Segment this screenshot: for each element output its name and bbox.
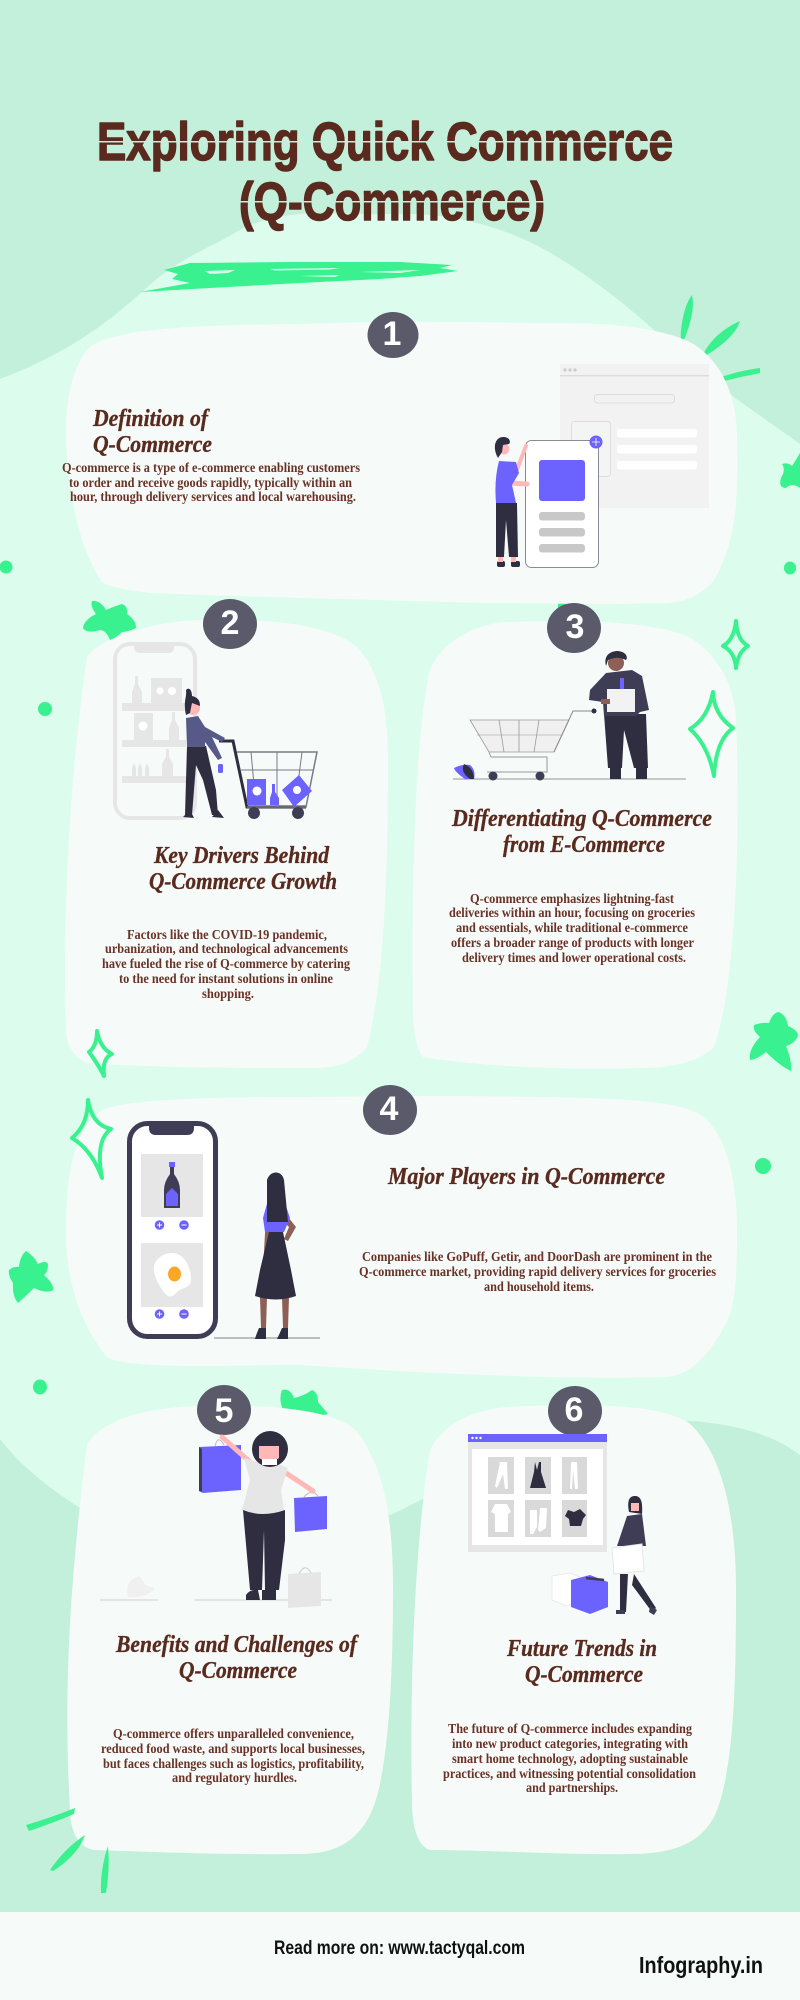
badge 2 — [203, 599, 257, 649]
text block 6: and partnerships. — [526, 1781, 618, 1796]
illustration: online clothing store — [468, 1434, 657, 1615]
badge 3 — [547, 603, 601, 653]
heading 6 — [506, 1636, 657, 1688]
brush stroke underline — [140, 262, 458, 292]
decoration: star behind badge 3 — [558, 603, 572, 612]
panel: card 6 — [411, 1405, 736, 1854]
text block 5: and regulatory hurdles. — [172, 1771, 297, 1786]
badge 5 — [197, 1385, 251, 1435]
decoration: dot right — [784, 562, 796, 574]
heading 1: Q-Commerce — [93, 432, 212, 458]
illustration: shopper with cart — [115, 642, 317, 819]
text block 3: deliveries within an hour, focusing on groceries — [449, 906, 695, 921]
decoration: dot left of card 2 — [38, 702, 52, 716]
decoration: star right of card 3 — [750, 1012, 798, 1071]
text block 3 — [449, 892, 695, 966]
text block 3: and essentials, while traditional e-commerce — [456, 921, 688, 936]
text block 3: offers a broader range of products with longer — [451, 936, 694, 951]
title — [97, 112, 673, 232]
decoration: green star right of card 1 — [780, 453, 800, 488]
text block 6 — [443, 1722, 696, 1796]
illustration: person with app screen — [495, 364, 709, 568]
text block 2: to the need for instant solutions in online — [119, 972, 333, 987]
decoration: rays top right — [681, 295, 760, 384]
text block 4: Companies like GoPuff, Getir, and DoorDash are prominent in the — [362, 1250, 712, 1265]
badge 6 — [548, 1386, 602, 1436]
heading 3: from E-Commerce — [503, 832, 665, 858]
text block 2: urbanization, and technological advancements — [105, 942, 348, 957]
heading 2 — [149, 843, 337, 895]
text block 4: Q-commerce market, providing rapid delivery services for groceries — [359, 1265, 716, 1280]
text block 1: to order and receive goods rapidly, typically within an — [69, 476, 352, 491]
heading 2: Q-Commerce Growth — [149, 869, 337, 895]
illustration: woman with shopping bags — [100, 1431, 332, 1608]
text block 6: practices, and witnessing potential consolidation — [443, 1767, 696, 1782]
decoration: dot left — [0, 560, 12, 574]
panel: card 3 — [413, 621, 738, 1069]
badge 2: 2 — [221, 604, 239, 642]
decoration: star behind card 5 — [280, 1390, 328, 1420]
badge 1: 1 — [383, 315, 401, 353]
text block 3: delivery times and lower operational costs. — [462, 951, 686, 966]
text block 2: Factors like the COVID-19 pandemic, — [127, 928, 327, 943]
text block 2 — [102, 928, 350, 1002]
text block 4: and household items. — [484, 1280, 594, 1295]
text block 5: but faces challenges such as logistics, profitability, — [103, 1757, 364, 1772]
panel: card 2 — [65, 620, 388, 1068]
title: Exploring Quick Commerce — [97, 112, 673, 172]
badge 4 — [363, 1085, 417, 1135]
text block 4 — [359, 1250, 716, 1295]
heading 6: Future Trends in — [506, 1636, 657, 1662]
heading 5 — [115, 1632, 359, 1684]
heading 3: Differentiating Q-Commerce — [451, 806, 712, 832]
background: light mint hill — [0, 213, 800, 1536]
text block 1: Q-commerce is a type of e-commerce enabling customers — [62, 461, 360, 476]
heading 1: Definition of — [92, 406, 210, 432]
heading 1 — [92, 406, 212, 458]
heading 5: Benefits and Challenges of — [115, 1632, 359, 1658]
text block 2: have fueled the rise of Q-commerce by catering — [102, 957, 350, 972]
decoration: big sparkle by card 4 — [72, 1100, 111, 1178]
illustration: phone and standing woman — [130, 1122, 320, 1339]
text block 2: shopping. — [202, 987, 254, 1002]
badge 4: 4 — [380, 1090, 399, 1128]
text block 1 — [62, 461, 360, 505]
text block 5 — [101, 1727, 365, 1786]
panel: card 5 — [67, 1406, 393, 1854]
footer — [0, 1912, 800, 2000]
decoration: large sparkle — [690, 692, 733, 776]
decoration: star top left of card 2 — [83, 601, 136, 640]
panel: card 4 — [66, 1096, 737, 1378]
badge 3: 3 — [566, 608, 584, 646]
text block 5: Q-commerce offers unparalleled convenience, — [113, 1727, 354, 1742]
decoration: rays bottom left — [26, 1808, 109, 1893]
decoration: sparkle in card 2 — [89, 1031, 112, 1076]
decoration: dot right of card 4 — [755, 1158, 771, 1174]
brand: Infography.in — [639, 1952, 763, 1978]
text block 1: hour, through delivery services and local warehousing. — [70, 490, 356, 505]
text block 6: into new product categories, integrating with — [452, 1737, 688, 1752]
heading 6: Q-Commerce — [525, 1662, 643, 1688]
text block 6: smart home technology, adopting sustainable — [452, 1752, 688, 1767]
title: (Q-Commerce) — [239, 172, 545, 232]
text block 6: The future of Q-commerce includes expanding — [448, 1722, 692, 1737]
decoration: small sparkle — [723, 621, 748, 668]
panel: card 1 — [66, 322, 737, 604]
heading 5: Q-Commerce — [179, 1658, 297, 1684]
heading 4: Major Players in Q-Commerce — [387, 1164, 665, 1190]
illustration: man with cart — [453, 651, 686, 780]
decoration: star left of card 4 — [9, 1251, 53, 1303]
heading 2: Key Drivers Behind — [153, 843, 330, 869]
text block 3: Q-commerce emphasizes lightning-fast — [470, 892, 674, 907]
badge 1 — [368, 312, 418, 358]
badge 5: 5 — [215, 1392, 233, 1430]
heading 3 — [451, 806, 712, 858]
decoration: dot left of card 5 — [33, 1380, 47, 1394]
badge 6: 6 — [565, 1391, 583, 1429]
read more link: Read more on: www.tactyqal.com — [274, 1938, 525, 1959]
text block 5: reduced food waste, and supports local businesses, — [101, 1742, 365, 1757]
